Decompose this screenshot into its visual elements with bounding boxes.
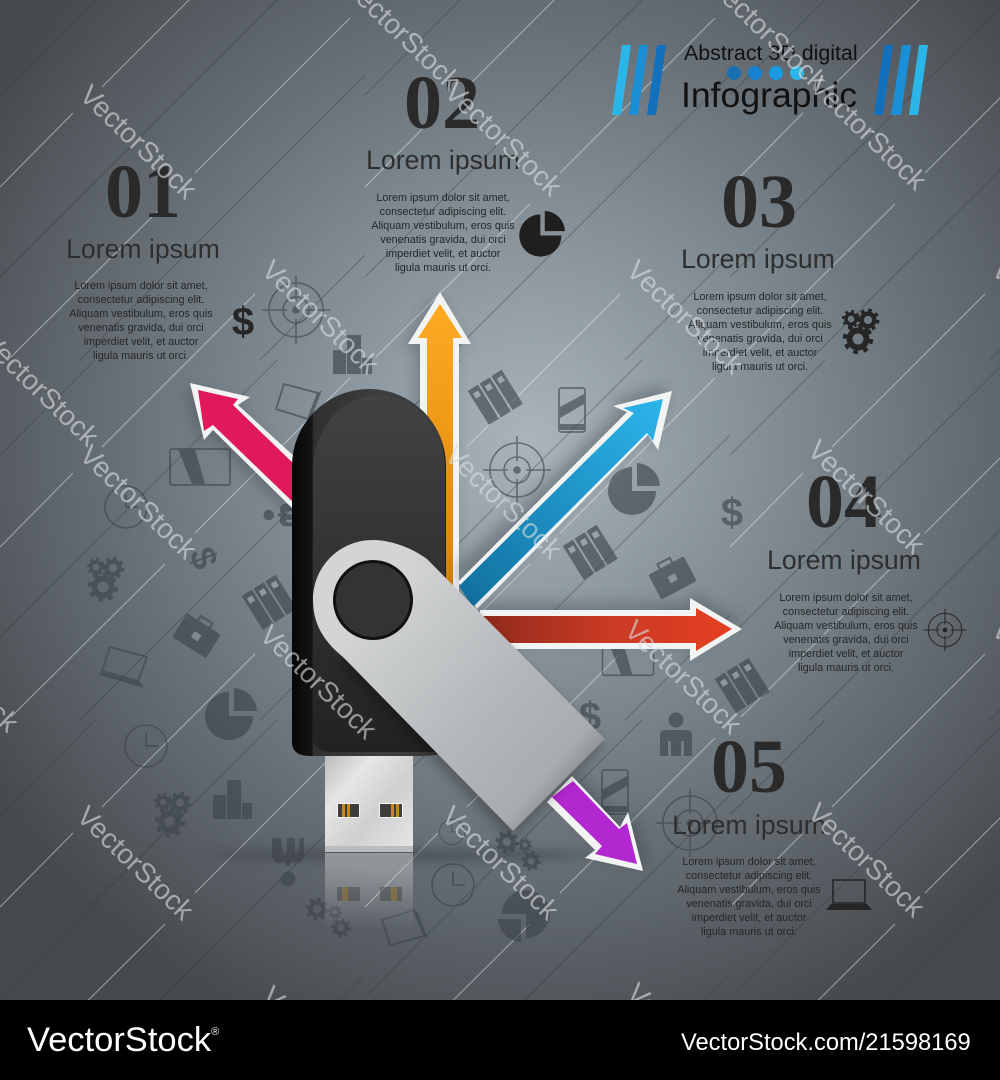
- swivel shadow: [340, 565, 602, 837]
- body text: consectetur adipiscing elit.: [697, 305, 823, 317]
- body text: imperdiet velit, et auctor: [692, 912, 807, 924]
- icon: dollar: [721, 491, 743, 535]
- icon: buildings: [213, 780, 252, 819]
- number: 05: [711, 725, 787, 809]
- body text: imperdiet velit, et auctor: [386, 248, 501, 260]
- body front panel: [313, 395, 445, 752]
- icon: folders: [468, 370, 523, 425]
- icon: gears: [497, 832, 540, 870]
- watermarks: VectorStock: [804, 70, 934, 197]
- subtitle: Abstract 3D digital: [684, 41, 858, 65]
- body text: venenatis gravida, dui orci: [686, 898, 812, 910]
- heading: Lorem ipsum: [672, 810, 826, 840]
- footer logo: VectorStock: [27, 1021, 211, 1059]
- panel: block 02: [366, 61, 565, 274]
- icon: target: [483, 436, 551, 504]
- icon: dollar: $: [232, 300, 254, 344]
- heading: Lorem ipsum: [366, 145, 520, 175]
- body text: Aliquam vestibulum, eros quis: [774, 620, 918, 632]
- body text: venenatis gravida, dui orci: [783, 634, 909, 646]
- watermarks: VectorStock: [439, 439, 569, 566]
- watermarks: VectorStock: [436, 800, 566, 927]
- number: 01: [105, 150, 181, 234]
- body text: ligula mauris ut orci.: [701, 926, 797, 938]
- body text: ligula mauris ut orci.: [712, 361, 808, 373]
- body text: Lorem ipsum dolor sit amet,: [74, 280, 208, 292]
- watermarks: VectorStock: [71, 800, 201, 927]
- faint background icons: [88, 276, 770, 945]
- body text: imperdiet velit, et auctor: [789, 648, 904, 660]
- body text: Lorem ipsum dolor sit amet,: [376, 192, 510, 204]
- watermarks: VectorStock: [621, 254, 751, 381]
- heading: Lorem ipsum: [767, 545, 921, 575]
- usb reflection: [325, 853, 413, 928]
- body text: consectetur adipiscing elit.: [380, 206, 506, 218]
- swivel button: [333, 560, 413, 640]
- body text: venenatis gravida, dui orci: [78, 322, 204, 334]
- panel: block 05: [672, 725, 872, 938]
- icon: book: [382, 910, 428, 945]
- icon: tablet: [170, 449, 230, 485]
- icon: laptop: [99, 647, 147, 688]
- connector hole right: [379, 803, 403, 818]
- icon: clock: [125, 725, 167, 767]
- icon: phone: [559, 388, 585, 432]
- icon: dollar: [579, 695, 601, 739]
- icon: folders: [715, 658, 770, 713]
- body text: ligula mauris ut orci.: [395, 262, 491, 274]
- footer logo: ®: [211, 1026, 219, 1038]
- swivel metal cover: [313, 540, 605, 831]
- heading: Lorem ipsum: [681, 244, 835, 274]
- right bars: [874, 45, 928, 115]
- body text: Lorem ipsum dolor sit amet,: [693, 291, 827, 303]
- body text: [371, 192, 515, 274]
- icon: buildings: [333, 335, 372, 374]
- icon: pie chart: [205, 688, 257, 740]
- icon: person: [263, 504, 297, 526]
- icon: pie chart: [608, 463, 660, 515]
- arrow: blue: [454, 385, 672, 609]
- icon: briefcase: [172, 609, 223, 658]
- body text: [774, 592, 918, 674]
- body text: ligula mauris ut orci.: [93, 350, 189, 362]
- number: 04: [806, 460, 882, 544]
- body text: Aliquam vestibulum, eros quis: [69, 308, 213, 320]
- watermarks: VectorStock: [74, 79, 204, 206]
- body text: [688, 291, 832, 373]
- panel: block 01: [66, 150, 254, 362]
- icon: gears: [843, 310, 878, 352]
- watermarks: VectorStock: [619, 614, 749, 741]
- floor shadow: [210, 848, 590, 862]
- watermarks: VectorStock: [439, 76, 569, 203]
- body text: Lorem ipsum dolor sit amet,: [682, 856, 816, 868]
- icon: pie chart: [519, 211, 565, 257]
- icon: tablet: [602, 645, 654, 675]
- header title block: [612, 41, 928, 115]
- body text: Aliquam vestibulum, eros quis: [688, 319, 832, 331]
- arrow: orange: [403, 292, 471, 595]
- dots: [727, 66, 804, 80]
- usb connector: [325, 750, 413, 852]
- heading: Lorem ipsum: [66, 234, 220, 264]
- icon: laptop: [826, 880, 872, 910]
- body text: venenatis gravida, dui orci: [697, 333, 823, 345]
- icon: target: [262, 276, 330, 344]
- usb drive body: [292, 389, 446, 756]
- icon: briefcase: [646, 552, 697, 600]
- panel: block 04: [767, 460, 966, 674]
- icon: key: [439, 819, 465, 845]
- icon: book: [276, 384, 322, 419]
- body text: venenatis gravida, dui orci: [380, 234, 506, 246]
- left bars: [612, 45, 666, 115]
- body text: Lorem ipsum dolor sit amet,: [779, 592, 913, 604]
- title: Infographic: [681, 75, 857, 115]
- watermarks: VectorStock: [802, 434, 932, 561]
- icon: phone: [602, 770, 628, 814]
- body text: [69, 280, 213, 362]
- body text: consectetur adipiscing elit.: [686, 870, 812, 882]
- icon: gears: [88, 558, 123, 600]
- panel: block 03: [681, 160, 878, 373]
- icon: bag: [272, 838, 304, 886]
- watermarks: VectorStock: [256, 254, 386, 381]
- body text: Aliquam vestibulum, eros quis: [677, 884, 821, 896]
- arrow: pink: [185, 383, 296, 516]
- number: 02: [404, 61, 480, 145]
- number: 03: [721, 160, 797, 244]
- body text: Aliquam vestibulum, eros quis: [371, 220, 515, 232]
- arrow: red: [480, 591, 742, 661]
- body text: imperdiet velit, et auctor: [84, 336, 199, 348]
- body text: consectetur adipiscing elit.: [783, 606, 909, 618]
- arrow: purple: [547, 772, 649, 871]
- body text: [677, 856, 821, 938]
- icon: target: [656, 789, 724, 857]
- body text: ligula mauris ut orci.: [798, 662, 894, 674]
- body text: consectetur adipiscing elit.: [78, 294, 204, 306]
- icon: folders: [242, 575, 297, 630]
- body text: imperdiet velit, et auctor: [703, 347, 818, 359]
- icon: pie chart: [498, 890, 550, 942]
- watermarks: VectorStock: [74, 439, 204, 566]
- icon: target: [924, 609, 966, 651]
- footer url: VectorStock.com/21598169: [681, 1030, 971, 1056]
- footer band: [0, 1000, 1000, 1080]
- watermarks: VectorStock: [802, 797, 932, 924]
- icon: clock: [432, 864, 474, 906]
- icon: clock: [105, 486, 147, 528]
- watermarks: VectorStock: [254, 619, 384, 746]
- icon: folders: [563, 525, 618, 580]
- icon: gears: [307, 899, 350, 936]
- icon: dollar: [181, 542, 227, 574]
- icon: gears: [155, 793, 190, 835]
- icon: person: [660, 712, 692, 756]
- connector hole left: [337, 803, 360, 818]
